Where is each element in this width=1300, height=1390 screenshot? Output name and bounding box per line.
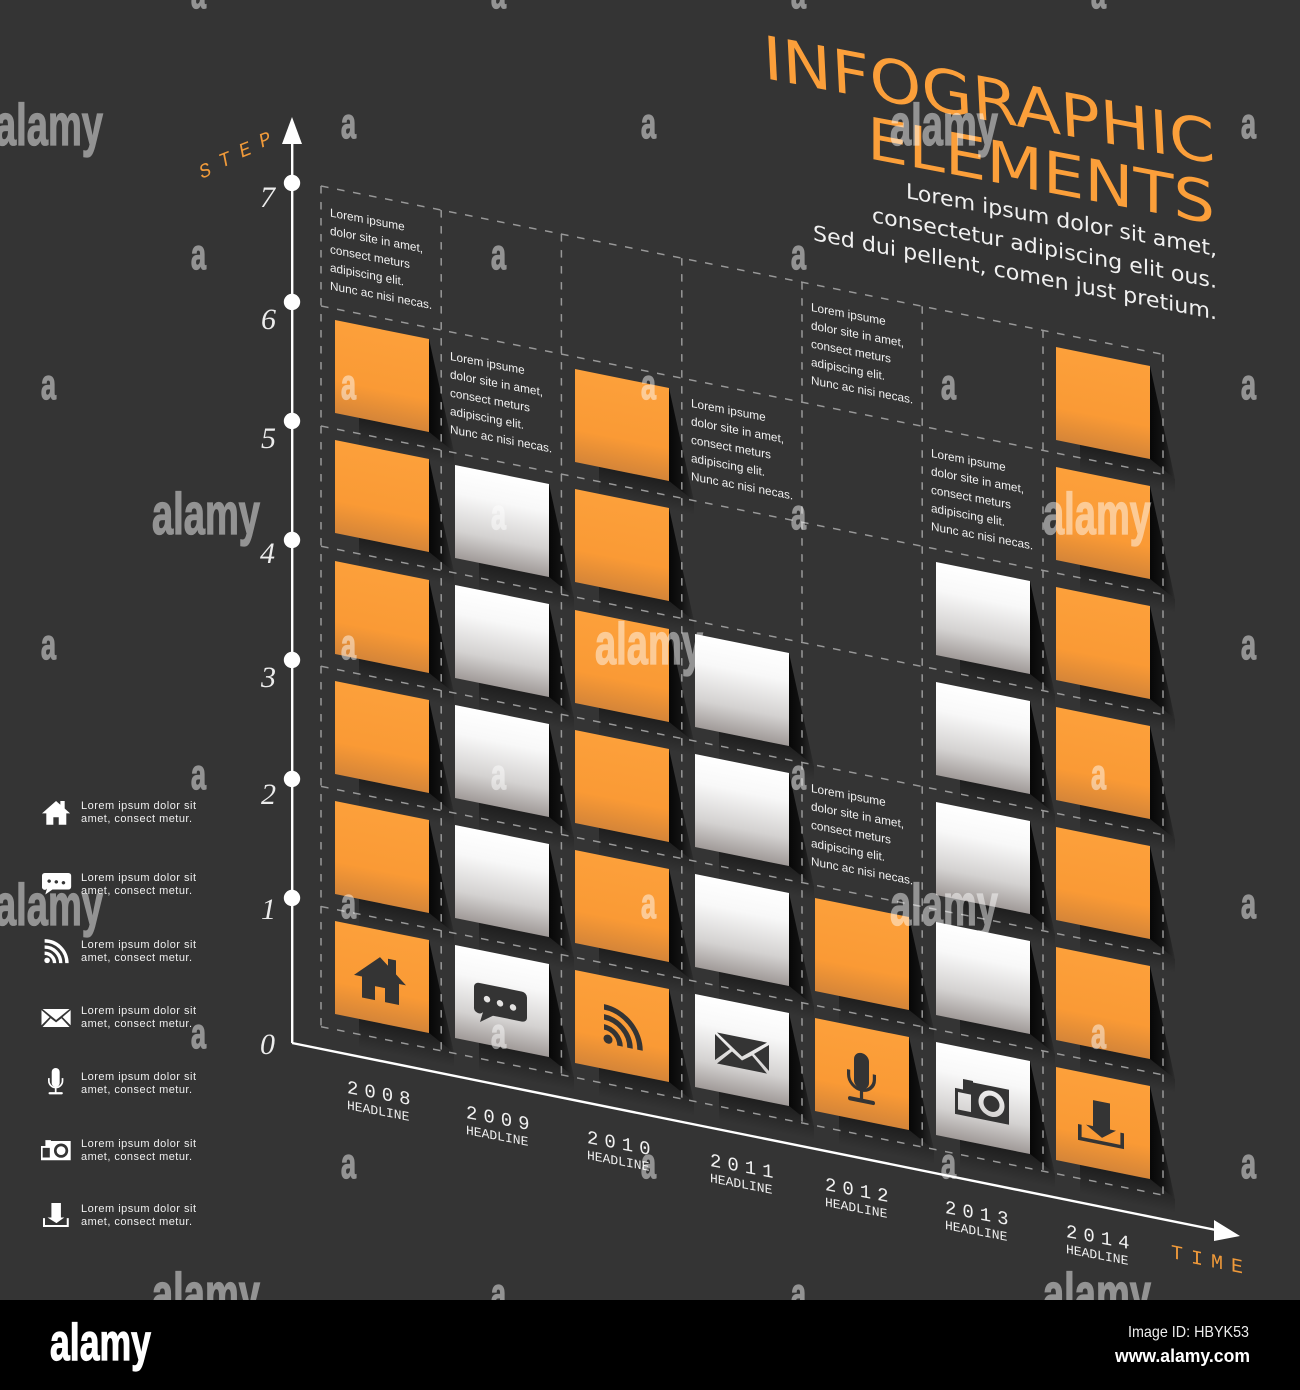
year label 2013: HEADLINE (945, 1218, 1008, 1245)
year label 2008: 2008 (347, 1077, 417, 1112)
watermark pattern: a (41, 621, 57, 669)
tiles column 2011 (695, 634, 814, 1140)
legend item: camera: Lorem ipsum dolor sit (81, 1138, 196, 1150)
tile 2010 row 2 (575, 730, 694, 876)
watermark pattern: a (1241, 1140, 1257, 1188)
watermark pattern: a (641, 880, 657, 928)
title (761, 24, 1217, 238)
y axis label: step (198, 127, 273, 185)
text block: 2012 upper: consect meturs (811, 337, 891, 366)
watermark pattern: alamy (890, 93, 998, 158)
text block: 2012 upper: adipiscing elit. (811, 355, 885, 383)
legend item: chat (42, 872, 196, 897)
legend item: microphone: amet, consect metur. (81, 1084, 192, 1096)
icon: rss (604, 1007, 640, 1050)
tile 2008 row 4 (335, 440, 454, 586)
tile 2009 row 4 (455, 465, 574, 611)
watermark pattern: a (1241, 361, 1257, 409)
tile 2014 row 4 (1056, 587, 1175, 733)
watermark pattern: a (791, 751, 807, 799)
y axis numbers (260, 181, 277, 1061)
watermark pattern: a (1241, 880, 1257, 928)
tile 2014 row 5 (1056, 467, 1175, 613)
icon: envelope (715, 1032, 769, 1074)
y axis numbers: 3 (260, 661, 276, 694)
y axis numbers: 7 (260, 181, 277, 214)
text block: 2009: adipiscing elit. (450, 404, 524, 432)
watermark pattern: a (191, 751, 207, 799)
y axis numbers: 4 (260, 537, 275, 570)
tile 2009 row 1 (455, 825, 574, 971)
text block: 2012 lower: Lorem ipsume (811, 781, 886, 809)
y axis numbers: 2 (261, 778, 276, 811)
watermark pattern: alamy (1043, 1262, 1151, 1327)
text block: 2012 upper: Lorem ipsume (811, 300, 886, 328)
tiles column 2008 (335, 320, 454, 1067)
legend item: mail: Lorem ipsum dolor sit (81, 1005, 196, 1017)
tile 2013 row 2 (936, 802, 1055, 948)
watermark pattern: alamy (152, 482, 260, 547)
tile 2010 row 4 (575, 489, 694, 635)
legend item: home (42, 800, 196, 825)
text block: 2008: Nunc ac nisi necas. (330, 279, 432, 312)
y axis numbers: 1 (261, 893, 276, 926)
watermark pattern: a (941, 361, 957, 409)
y axis label: step: E (238, 137, 253, 164)
tile 2013 row 0 (936, 1042, 1055, 1188)
year label 2008: HEADLINE (347, 1098, 410, 1125)
x axis label: time: I (1191, 1247, 1203, 1272)
watermark pattern: a (1091, 1010, 1107, 1058)
y axis label: step: T (218, 147, 233, 174)
watermark pattern: a (1241, 100, 1257, 148)
legend (41, 800, 196, 1228)
text block: 2009: Lorem ipsume (450, 349, 525, 377)
year label 2009: 2009 (466, 1102, 536, 1137)
tile 2012 row 1 (815, 898, 934, 1044)
year label 2011: HEADLINE (710, 1171, 773, 1198)
tile 2011 row 3 (695, 634, 814, 780)
watermark pattern: a (491, 491, 507, 539)
watermark pattern: a (341, 361, 357, 409)
tile 2011 row 0 (695, 994, 814, 1140)
watermark pattern: alamy (890, 873, 998, 938)
watermark pattern: a (341, 100, 357, 148)
watermark pattern: alamy (152, 1262, 260, 1327)
text block: 2011: consect meturs (691, 433, 771, 462)
text block: 2013: Lorem ipsume (931, 446, 1006, 474)
year label 2009: HEADLINE (466, 1123, 529, 1150)
tile 2014 row 2 (1056, 827, 1175, 973)
year label 2012: 2012 (825, 1174, 895, 1209)
tile 2013 row 3 (936, 682, 1055, 828)
text block: 2008: adipiscing elit. (330, 260, 404, 288)
text block: 2011: Lorem ipsume (691, 396, 766, 424)
tile 2008 row 2 (335, 681, 454, 827)
y axis label: step: S (198, 158, 213, 185)
legend item: download: Lorem ipsum dolor sit (81, 1203, 196, 1215)
tiles column 2012 (815, 898, 934, 1164)
legend item: rss: Lorem ipsum dolor sit (81, 939, 196, 951)
legend item: home: Lorem ipsum dolor sit (81, 800, 196, 812)
dashed grid (321, 186, 1163, 1195)
tile 2010 row 1 (575, 850, 694, 996)
legend item: camera: amet, consect metur. (81, 1151, 192, 1163)
watermark pattern: a (1241, 621, 1257, 669)
legend item: chat: Lorem ipsum dolor sit (81, 872, 196, 884)
tile 2014 row 0 (1056, 1067, 1175, 1213)
watermark pattern: a (491, 751, 507, 799)
tile 2014 row 1 (1056, 947, 1175, 1093)
year label 2011: 2011 (710, 1150, 780, 1185)
tiles column 2013 (936, 562, 1055, 1188)
icon: camera (955, 1077, 1009, 1125)
chart: isometric step grid (335, 320, 1175, 1213)
text block: 2013: adipiscing elit. (931, 501, 1005, 529)
text block: 2013: Nunc ac nisi necas. (931, 519, 1033, 553)
x axis label: time: T (1171, 1242, 1183, 1267)
legend item: microphone (49, 1068, 196, 1096)
x axis label: time: M (1211, 1251, 1223, 1276)
tiles column 2014 (1056, 347, 1175, 1213)
tile 2010 row 5 (575, 369, 694, 515)
text block: 2008: Lorem ipsume (330, 206, 405, 234)
year label 2012: HEADLINE (825, 1195, 888, 1222)
tile 2013 row 4 (936, 562, 1055, 708)
title: INFOGRAPHIC (761, 24, 1217, 179)
tile 2014 row 3 (1056, 707, 1175, 853)
tiles column 2009 (455, 465, 574, 1091)
tiles column 2010 (575, 369, 694, 1116)
year label 2013: 2013 (945, 1197, 1015, 1232)
tile 2008 row 5 (335, 320, 454, 466)
title: ELEMENTS (867, 104, 1215, 238)
text block: 2012 upper: dolor site in amet, (811, 318, 904, 350)
watermark pattern: a (491, 231, 507, 279)
tile 2009 row 2 (455, 705, 574, 851)
watermark pattern: a (1091, 751, 1107, 799)
watermark pattern: alamy (1043, 482, 1151, 547)
text block: 2012 lower: Nunc ac nisi necas. (811, 854, 913, 888)
y axis numbers: 0 (260, 1028, 275, 1061)
legend item: download (44, 1203, 196, 1228)
year label 2014: 2014 (1066, 1221, 1136, 1256)
text block: 2011: dolor site in amet, (691, 414, 784, 446)
legend item: home: amet, consect metur. (81, 813, 192, 825)
y axis numbers: 5 (261, 422, 276, 455)
text block: 2012 upper: Nunc ac nisi necas. (811, 373, 913, 407)
subtitle text: Lorem ipsum dolor sit amet, (906, 178, 1217, 261)
legend item: mail: amet, consect metur. (81, 1018, 192, 1030)
y axis with arrow and step markers (282, 117, 302, 1043)
footer url: www.alamy.com (1114, 1346, 1250, 1366)
text block: 2008: dolor site in amet, (330, 224, 423, 255)
tile 2010 row 0 (575, 970, 694, 1116)
tile 2010 row 3 (575, 610, 694, 756)
footer image id: Image ID: HBYK53 (1128, 1324, 1249, 1341)
watermark pattern: a (791, 231, 807, 279)
watermark pattern: a (191, 1010, 207, 1058)
text block: 2012 lower: consect meturs (811, 818, 891, 847)
text block: 2011: Nunc ac nisi necas. (691, 469, 793, 503)
subtitle text: Sed dui pellent, comen just pretium. (813, 220, 1217, 325)
tile 2011 row 2 (695, 754, 814, 900)
watermark pattern: a (641, 1140, 657, 1188)
watermark pattern: a (791, 1270, 807, 1318)
year label 2010: 2010 (587, 1127, 657, 1162)
tile 2011 row 1 (695, 874, 814, 1020)
text block: 2009: consect meturs (450, 386, 530, 415)
subtitle text: consectetur adipiscing elit ous. (872, 202, 1217, 293)
text block: 2009: Nunc ac nisi necas. (450, 422, 552, 456)
year label 2014: HEADLINE (1066, 1242, 1129, 1269)
legend item: chat: amet, consect metur. (81, 885, 192, 897)
legend item: microphone: Lorem ipsum dolor sit (81, 1071, 196, 1083)
text block: 2013: dolor site in amet, (931, 464, 1024, 496)
x axis label: time: E (1231, 1255, 1243, 1280)
watermark pattern: a (941, 1140, 957, 1188)
tile 2009 row 0 (455, 945, 574, 1091)
watermark pattern: a (641, 100, 657, 148)
watermark pattern: a (491, 1270, 507, 1318)
watermark pattern: a (341, 621, 357, 669)
watermark pattern: a (341, 880, 357, 928)
icon: chat bubble (474, 982, 527, 1032)
tile 2014 row 6 (1056, 347, 1175, 493)
text block: 2011: adipiscing elit. (691, 451, 765, 479)
tile 2008 row 3 (335, 561, 454, 707)
tile 2012 row 0 (815, 1018, 934, 1164)
watermark pattern: a (191, 231, 207, 279)
subtitle text (813, 178, 1217, 325)
tile 2008 row 1 (335, 801, 454, 947)
footer logo: alamy (50, 1314, 151, 1372)
x axis with arrow (292, 1043, 1240, 1241)
year label 2010: HEADLINE (587, 1148, 650, 1175)
tile 2008 row 0 (335, 921, 454, 1067)
icon: house (354, 952, 406, 1006)
watermark pattern: a (641, 361, 657, 409)
text block: 2012 lower: adipiscing elit. (811, 836, 885, 864)
icon: microphone (848, 1050, 875, 1105)
legend item: rss: amet, consect metur. (81, 952, 192, 964)
y axis numbers: 6 (261, 303, 276, 336)
tile 2013 row 1 (936, 922, 1055, 1068)
text block: 2008: consect meturs (330, 242, 410, 271)
y axis label: step: P (258, 127, 273, 154)
text block: 2012 lower: dolor site in amet, (811, 799, 904, 831)
legend item: mail (42, 1005, 196, 1030)
text block: 2009: dolor site in amet, (450, 367, 543, 399)
footer bar (0, 1300, 1300, 1390)
x axis label: time (1171, 1242, 1243, 1280)
tile 2009 row 3 (455, 585, 574, 731)
icon: download (1080, 1097, 1122, 1147)
legend item: download: amet, consect metur. (81, 1216, 192, 1228)
watermark pattern: a (341, 1140, 357, 1188)
text block: 2013: consect meturs (931, 483, 1011, 512)
watermark pattern: a (41, 361, 57, 409)
watermark pattern: alamy (595, 612, 703, 677)
legend item: rss (44, 939, 196, 964)
watermark pattern: a (491, 1010, 507, 1058)
legend item: camera (41, 1138, 196, 1163)
watermark pattern: a (791, 491, 807, 539)
